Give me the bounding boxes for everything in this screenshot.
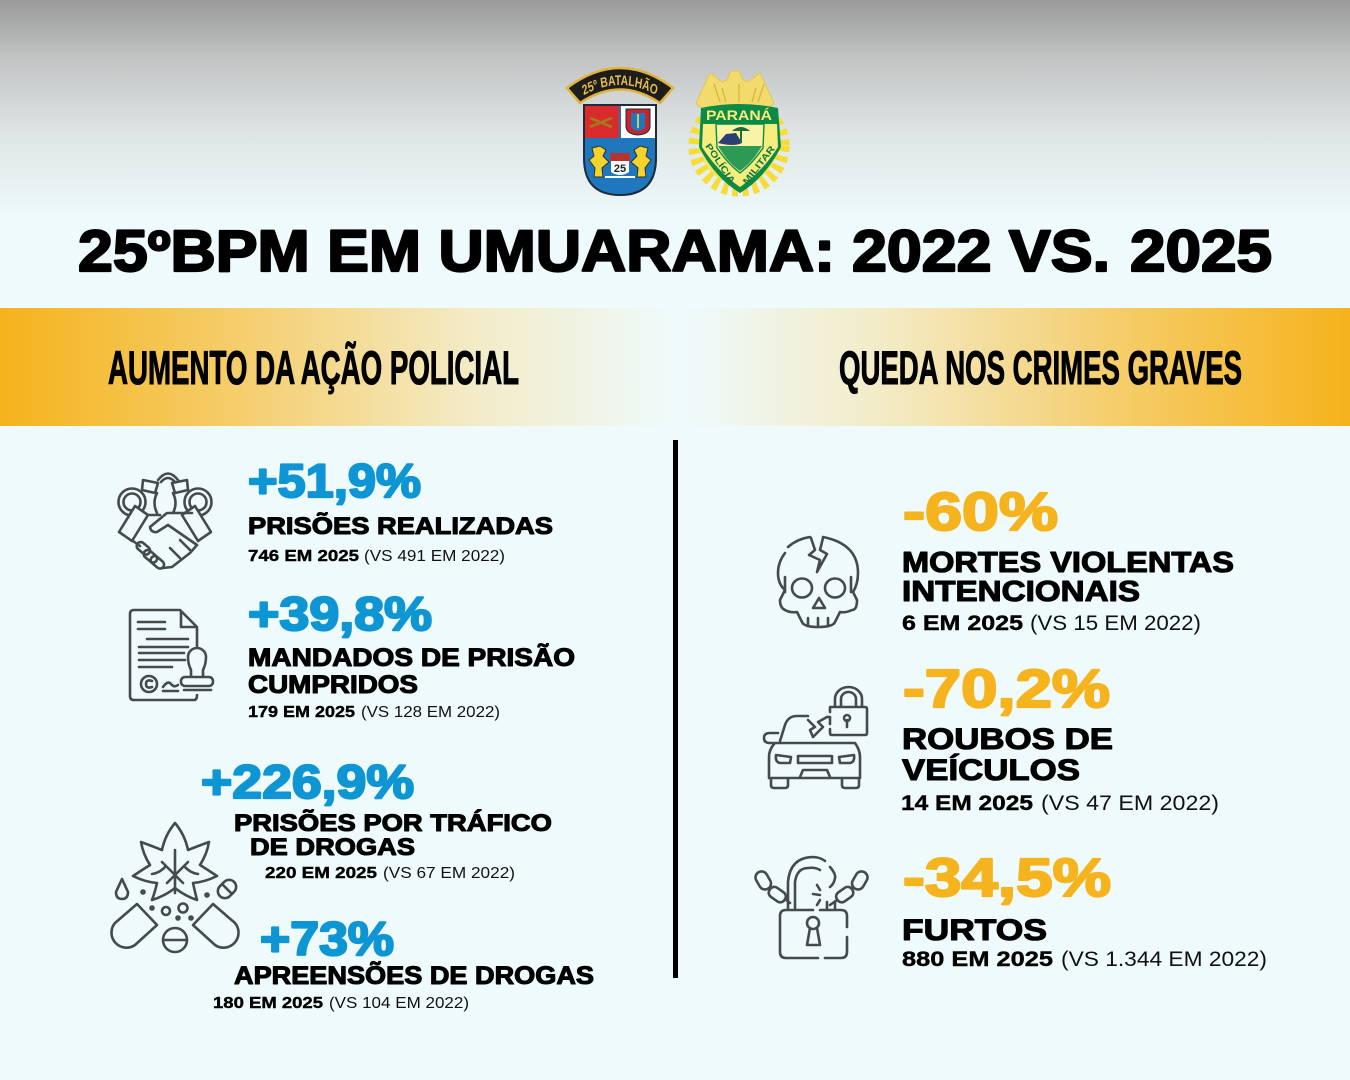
stat: drug seizures: APREENSÕES DE DROGAS xyxy=(234,960,594,990)
stat: vehicle robberies: 14 EM 2025 xyxy=(901,792,1033,815)
banner: left xyxy=(0,308,672,426)
stat: drug trafficking arrests: +226,9% xyxy=(201,755,414,808)
stat: warrants xyxy=(248,587,575,721)
stat: vehicle robberies xyxy=(901,659,1219,815)
stat: drug seizures: (VS 104 EM 2022) xyxy=(329,995,469,1012)
stat: arrests: +51,9% xyxy=(248,454,421,507)
stat: thefts: 880 EM 2025 xyxy=(902,948,1053,971)
icon: broken padlock and chains xyxy=(753,857,870,958)
stat: warrants: (VS 128 EM 2022) xyxy=(361,704,500,721)
stat: arrests: 746 EM 2025 xyxy=(248,548,359,565)
title: 2025 xyxy=(1130,219,1272,284)
stat: drug trafficking arrests: (VS 67 EM 2022) xyxy=(383,865,515,882)
stat: vehicle robberies: VEÍCULOS xyxy=(902,753,1080,787)
stat: drug trafficking arrests: 220 EM 2025 xyxy=(265,865,377,882)
stat: drug seizures xyxy=(213,912,594,1012)
icon: handcuffs and handshake xyxy=(118,474,212,570)
stat: violent deaths: INTENCIONAIS xyxy=(902,576,1140,608)
icon: warrant document xyxy=(130,610,213,700)
stat: arrests: PRISÕES REALIZADAS xyxy=(248,512,553,540)
icon: car and padlock xyxy=(764,687,867,788)
panel: police action xyxy=(111,454,594,1012)
title: 2022 VS. xyxy=(852,219,1110,284)
stat: violent deaths xyxy=(902,482,1234,635)
banner: left: AUMENTO DA AÇÃO POLICIAL xyxy=(108,341,519,394)
stat: violent deaths: 6 EM 2025 xyxy=(902,612,1023,635)
stat: drug seizures: +73% xyxy=(260,912,394,965)
stat: warrants: +39,8% xyxy=(248,587,432,640)
stat: thefts: (VS 1.344 EM 2022) xyxy=(1061,948,1267,971)
panel: serious crimes xyxy=(753,482,1267,971)
stat: arrests xyxy=(248,454,553,565)
banner: right xyxy=(684,308,1350,426)
stat: warrants: 179 EM 2025 xyxy=(248,704,355,721)
stat: drug seizures: 180 EM 2025 xyxy=(213,995,323,1012)
stat: violent deaths: -60% xyxy=(903,482,1058,542)
stat: drug trafficking arrests: DE DROGAS xyxy=(250,834,415,861)
stat: vehicle robberies: ROUBOS DE xyxy=(902,723,1113,756)
stat: drug trafficking arrests: PRISÕES POR TRÁFICO xyxy=(234,809,552,837)
title: 25ºBPM EM UMUARAMA: xyxy=(78,219,835,284)
logo: Paraná Military Police badge: MILITAR xyxy=(741,143,777,186)
icon: cracked skull xyxy=(778,537,858,627)
icon: drugs xyxy=(111,823,239,952)
stat: violent deaths: (VS 15 EM 2022) xyxy=(1030,612,1201,635)
stat: drug trafficking arrests xyxy=(201,755,552,882)
stat: vehicle robberies: (VS 47 EM 2022) xyxy=(1041,792,1219,815)
logo: Paraná Military Police badge: POLÍCIA xyxy=(703,142,738,186)
stat: vehicle robberies: -70,2% xyxy=(903,659,1110,719)
logo: 25th battalion shield: 25º BATALHÃO xyxy=(582,75,658,95)
stat: thefts: FURTOS xyxy=(902,914,1047,947)
stat: thefts xyxy=(902,848,1267,971)
stat: warrants: CUMPRIDOS xyxy=(248,671,418,699)
title xyxy=(78,219,1272,284)
stat: warrants: MANDADOS DE PRISÃO xyxy=(248,642,575,672)
stat: arrests: (VS 491 EM 2022) xyxy=(364,548,505,565)
stat: thefts: -34,5% xyxy=(903,848,1111,908)
logo: Paraná Military Police badge xyxy=(695,71,783,193)
logo: Paraná Military Police badge: PARANÁ xyxy=(706,107,772,123)
logo: 25th battalion shield: 25 xyxy=(614,163,626,175)
stat: violent deaths: MORTES VIOLENTAS xyxy=(902,547,1234,579)
logo: 25th battalion shield xyxy=(565,66,675,196)
